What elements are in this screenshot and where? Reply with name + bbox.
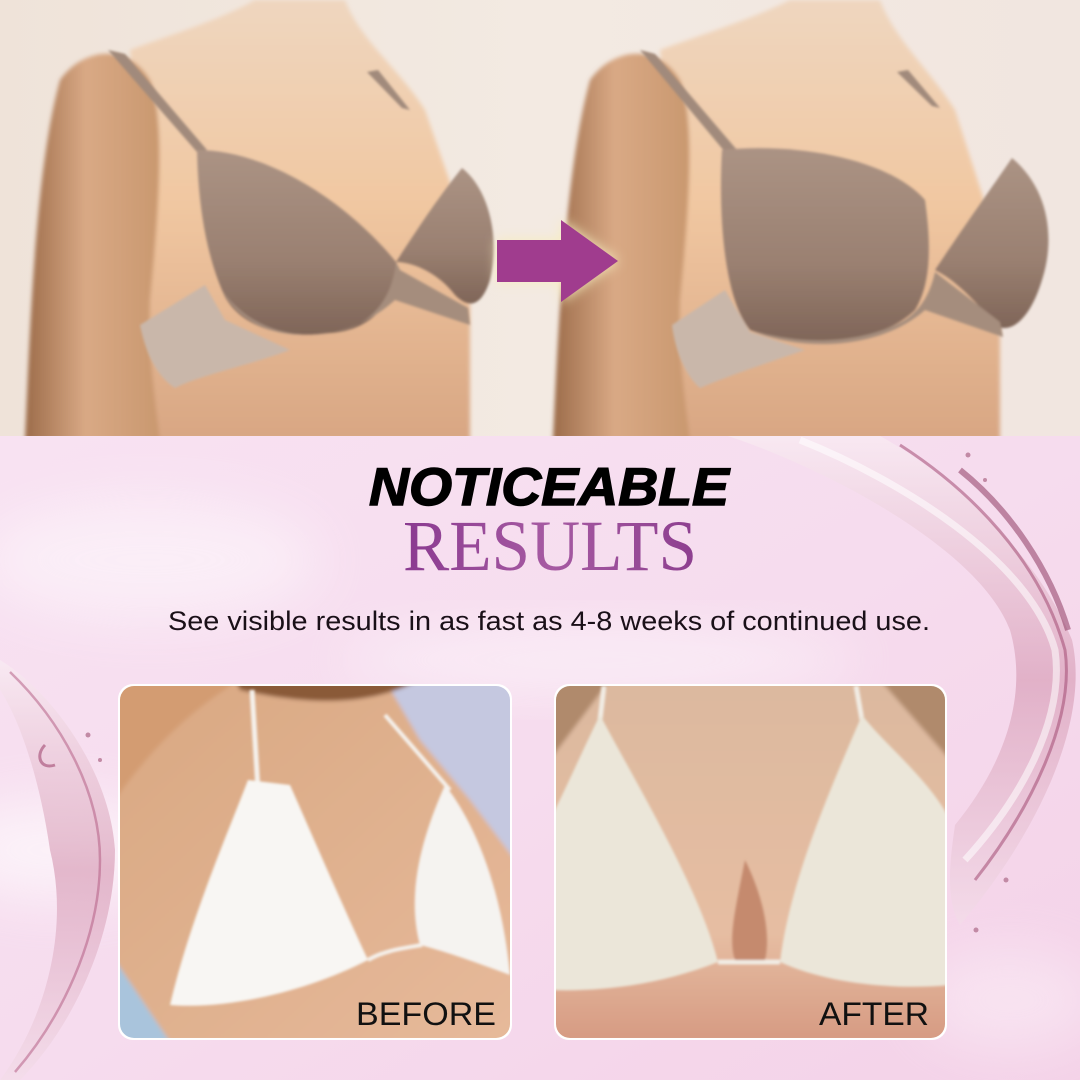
right figure after <box>553 0 1000 440</box>
water splash: top right <box>728 436 1076 932</box>
pink background panel <box>0 435 1080 1080</box>
arrow glow <box>497 220 618 302</box>
left figure before <box>25 0 470 440</box>
heading: results: RESULTS <box>403 506 697 586</box>
water splash: bottom left <box>0 660 115 1080</box>
subtitle: See visible results in as fast as 4-8 weeks of continued use. <box>168 606 930 636</box>
panel: before photo <box>115 680 515 1042</box>
label: after: AFTER <box>819 996 929 1032</box>
label: before: BEFORE <box>356 996 496 1032</box>
arrow <box>497 220 618 302</box>
panel: top comparison photo <box>0 0 1080 440</box>
panel: after photo <box>550 680 950 1042</box>
heading: noticeable: NOTICEABLE <box>369 458 731 517</box>
